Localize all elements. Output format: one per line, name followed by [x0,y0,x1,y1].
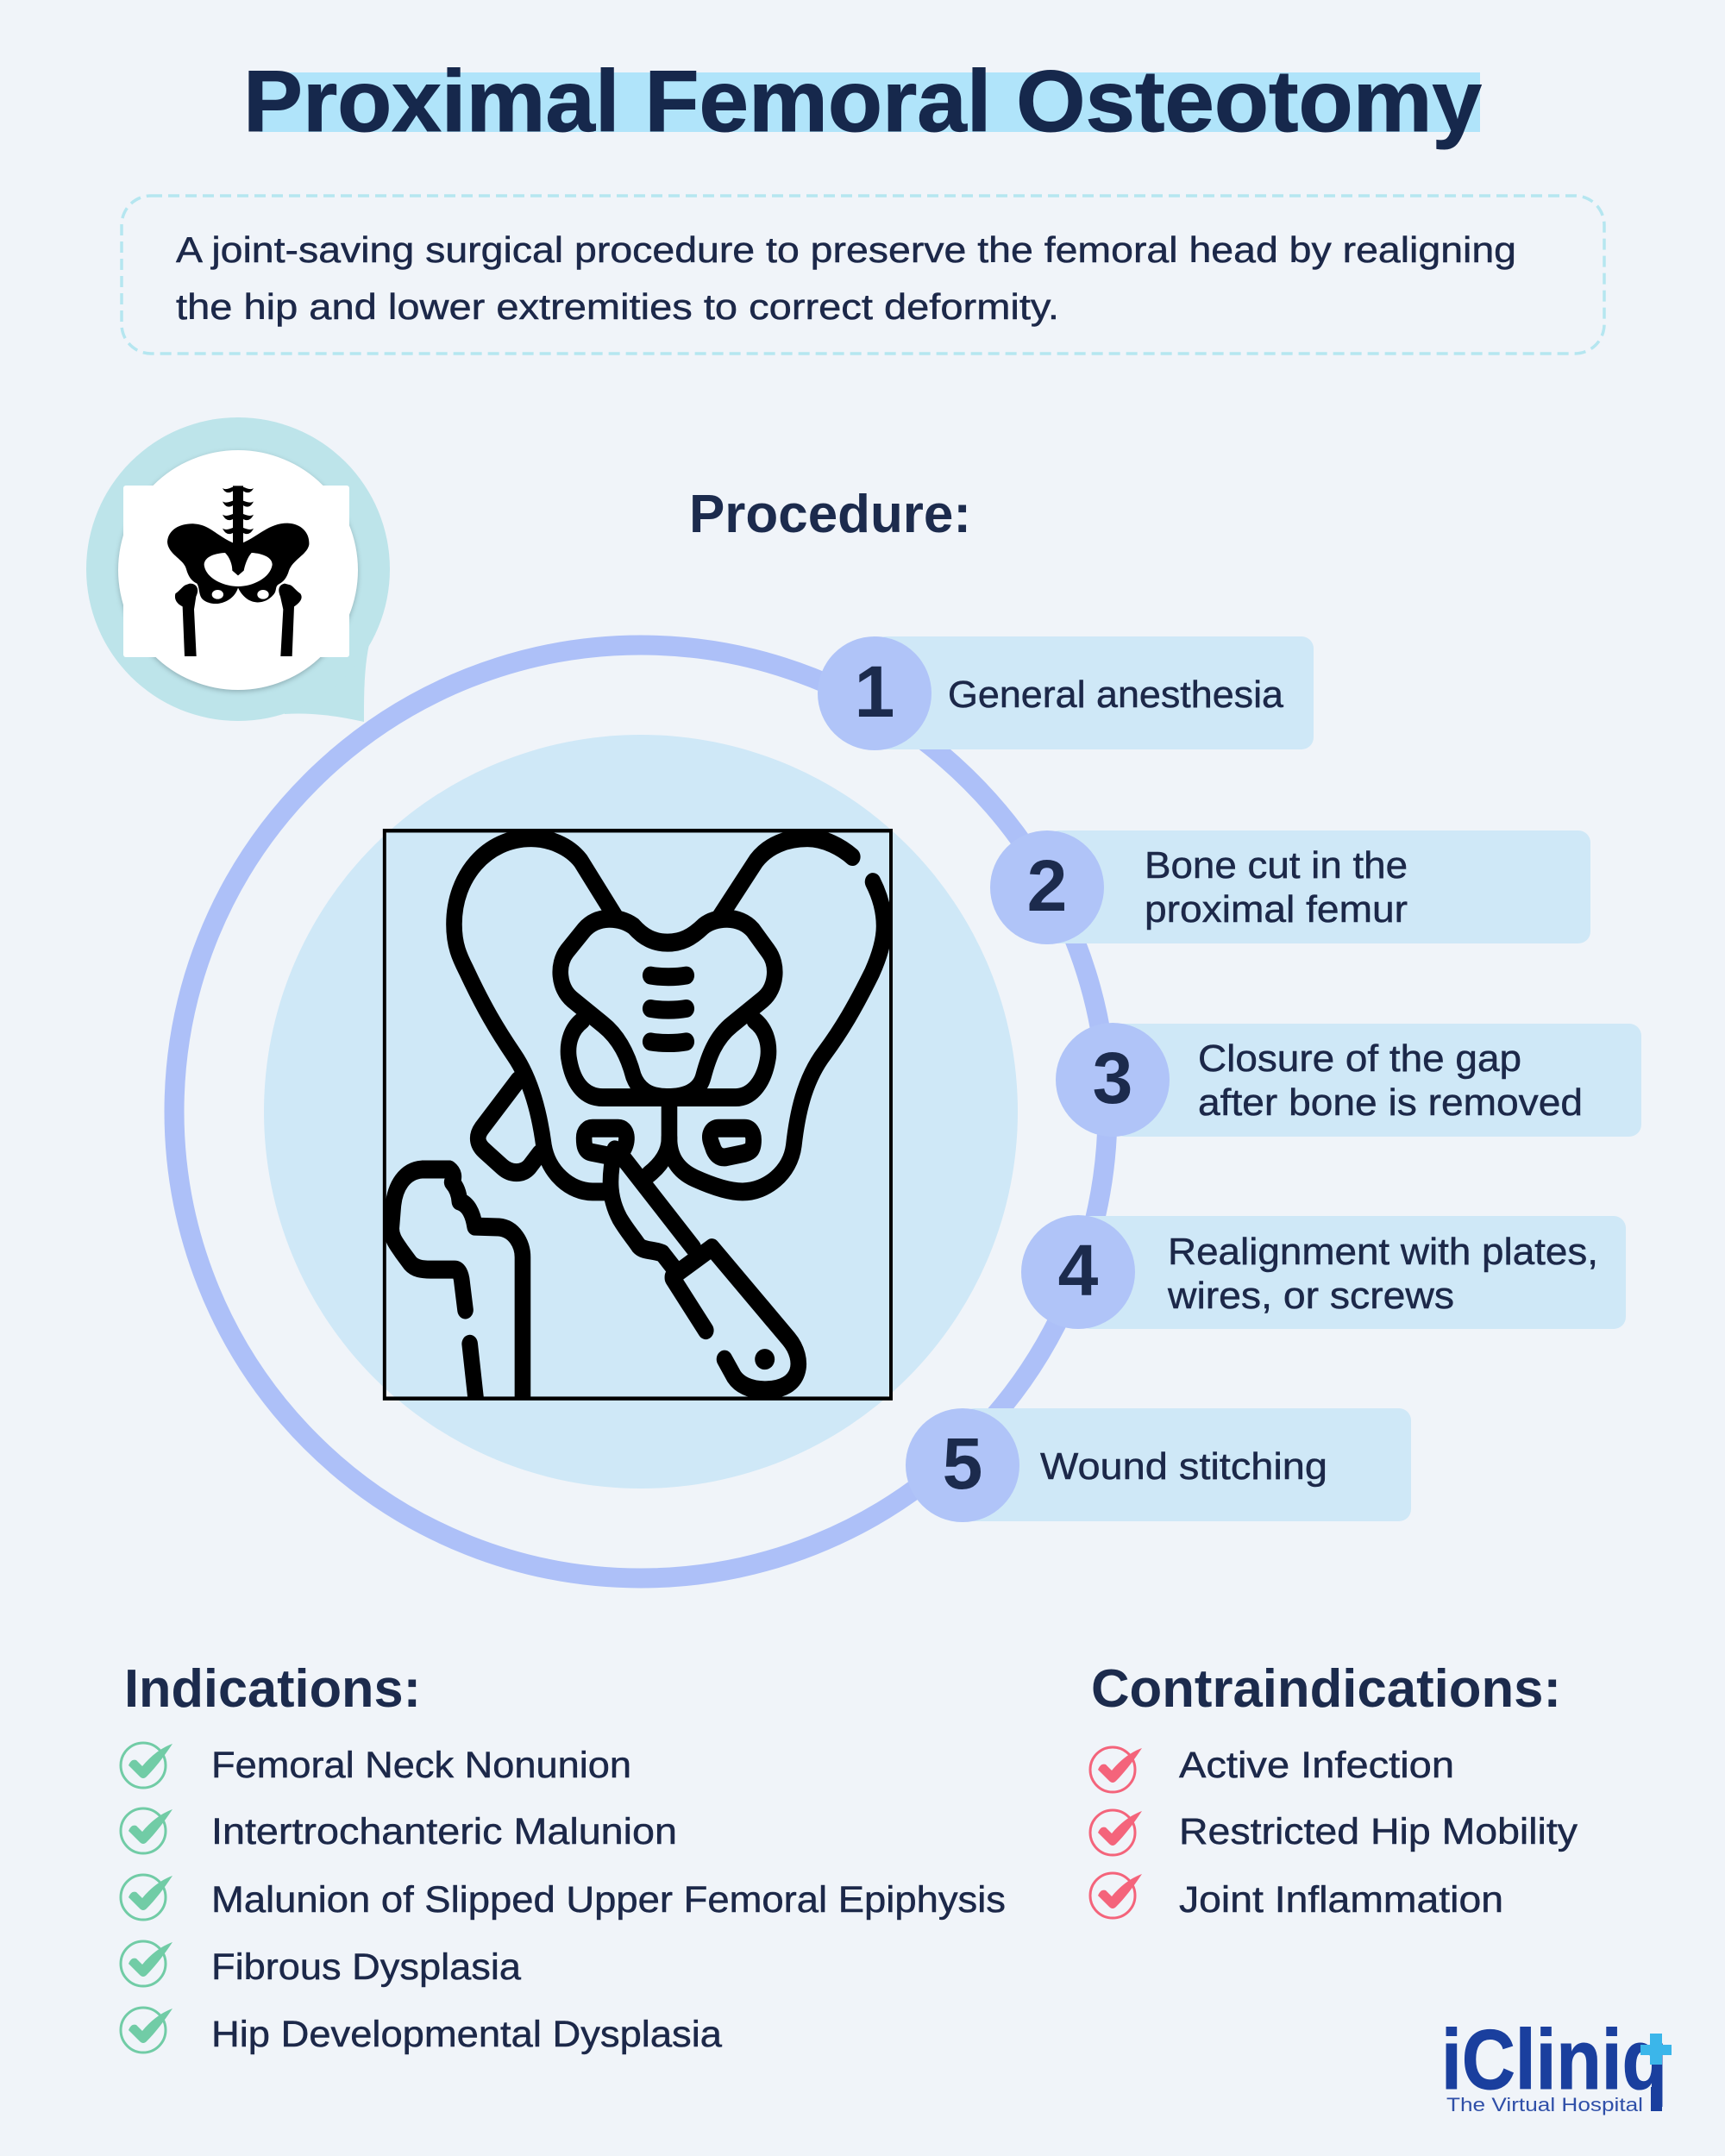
step 4 [1021,1215,1626,1329]
step 3: Closure of the gap [1198,1037,1521,1080]
title: Proximal Femoral Osteotomy [243,53,1482,150]
step 2: Bone cut in the [1145,844,1408,887]
icon: hip surgery with scalpel [385,830,891,1400]
step 2: 2 [1027,845,1067,926]
list item: intertrochanteric malunion: Intertrochanteric Malunion [211,1811,677,1852]
step 1: General anesthesia [948,674,1284,716]
heading: contraindications: Contraindications: [1091,1659,1561,1719]
step 1: 1 [855,651,894,732]
step 5 [906,1408,1411,1522]
step 4: 4 [1058,1230,1099,1311]
list item: active infection: Active Infection [1179,1745,1454,1786]
heading: procedure: Procedure: [689,485,971,544]
step 4: wires, or screws [1167,1275,1454,1317]
panel: light circle [264,735,1018,1489]
logo: iCliniq: The Virtual Hospital [1446,2094,1643,2115]
panel: definition: the hip and lower extremities to correct deformity. [176,286,1059,327]
step 5: Wound stitching [1040,1445,1327,1488]
heading: indications: Indications: [124,1659,421,1719]
list item: joint inflammation: Joint Inflammation [1179,1879,1503,1921]
list item: joint inflammation [1090,1873,1503,1921]
list item: malunion of SUFE: Malunion of Slipped Upper Femoral Epiphysis [211,1879,1006,1921]
list item: femoral neck nonunion: Femoral Neck Nonunion [211,1745,631,1786]
step 4: Realignment with plates, [1168,1231,1598,1273]
panel: definition: A joint-saving surgical procedure to preserve the femoral head by realigning [176,229,1516,270]
step 3 [1056,1023,1641,1137]
ring [174,645,1107,1578]
list item: fibrous dysplasia [121,1941,521,1988]
panel: definition [122,196,1604,354]
step 2 [990,830,1590,944]
step 5: 5 [943,1423,982,1504]
list item: hip developmental dysplasia: Hip Developmental Dysplasia [211,2014,722,2055]
list item: restricted hip mobility [1090,1810,1578,1855]
logo: iCliniq: iCliniq [1441,2012,1667,2107]
step 2: proximal femur [1145,888,1408,931]
list item: active infection [1090,1745,1454,1792]
list item: fibrous dysplasia: Fibrous Dysplasia [211,1946,521,1988]
panel: indications [121,1659,1006,2055]
step 3: 3 [1093,1037,1132,1119]
step 3: after bone is removed [1198,1081,1583,1124]
list item: restricted hip mobility: Restricted Hip Mobility [1179,1811,1578,1852]
step 1 [818,636,1314,750]
icon: pelvis badge [86,417,390,722]
panel: contraindications [1090,1659,1578,1921]
